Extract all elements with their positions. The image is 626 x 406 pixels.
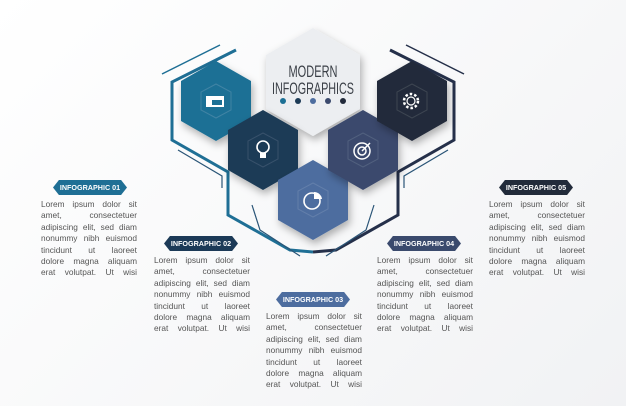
text 05: dolor bbox=[550, 199, 569, 209]
text 05: wisi bbox=[571, 267, 585, 277]
hex 2 bbox=[228, 110, 298, 190]
text 02: ipsum bbox=[185, 255, 208, 265]
hex 5 bbox=[377, 61, 447, 141]
label 04 bbox=[387, 236, 461, 251]
text 05: aliquam bbox=[556, 256, 585, 266]
text 04: laoreet bbox=[448, 301, 473, 311]
text 03: euismod bbox=[331, 345, 362, 355]
text 05: diam bbox=[567, 222, 585, 232]
text 03: nonummy bbox=[266, 345, 302, 355]
label 01: INFOGRAPHIC 01 bbox=[60, 183, 120, 192]
text 02: amet, bbox=[154, 266, 175, 276]
label 04: INFOGRAPHIC 04 bbox=[394, 239, 454, 248]
text 05: adipiscing bbox=[489, 222, 526, 232]
text 05: euismod bbox=[554, 233, 585, 243]
text 01: laoreet bbox=[112, 245, 137, 255]
label 05 bbox=[499, 180, 573, 195]
text 01: erat bbox=[41, 267, 55, 277]
text 04: dolor bbox=[438, 255, 457, 265]
text 05: magna bbox=[521, 256, 547, 266]
text 03: sit bbox=[354, 311, 362, 321]
text 05: tincidunt bbox=[489, 245, 520, 255]
text 05: Ut bbox=[553, 267, 562, 277]
text 02: elit, bbox=[196, 278, 209, 288]
text 01: elit, bbox=[83, 222, 96, 232]
text 05: consectetuer bbox=[537, 210, 585, 220]
text 05: volutpat. bbox=[513, 267, 544, 277]
text 04: sed bbox=[437, 278, 450, 288]
text 01 bbox=[41, 199, 137, 277]
hex 4 bbox=[328, 110, 398, 190]
text 01: dolor bbox=[102, 199, 121, 209]
text 02: wisi bbox=[236, 323, 250, 333]
text 02: consectetuer bbox=[202, 266, 250, 276]
text 02: ut bbox=[201, 301, 208, 311]
text 03: adipiscing bbox=[266, 334, 303, 344]
outline frame lines bbox=[162, 45, 464, 256]
text 05: amet, bbox=[489, 210, 510, 220]
text 02: magna bbox=[186, 312, 212, 322]
text 05: nonummy bbox=[489, 233, 525, 243]
text 04: elit, bbox=[419, 278, 432, 288]
text 04: nonummy bbox=[377, 289, 413, 299]
text 02: nibh bbox=[197, 289, 212, 299]
text 03: erat bbox=[266, 379, 280, 389]
text 03: laoreet bbox=[337, 357, 362, 367]
text 02: erat bbox=[154, 323, 168, 333]
text 01: magna bbox=[73, 256, 99, 266]
text 03: tincidunt bbox=[266, 357, 297, 367]
text 03: dolor bbox=[327, 311, 346, 321]
text 01: aliquam bbox=[108, 256, 137, 266]
text 01: Lorem bbox=[41, 199, 65, 209]
text 01: adipiscing bbox=[41, 222, 78, 232]
text 04: wisi bbox=[459, 323, 473, 333]
text 04: magna bbox=[409, 312, 435, 322]
dots bbox=[280, 98, 346, 104]
label 03: INFOGRAPHIC 03 bbox=[283, 295, 343, 304]
text 01: nibh bbox=[84, 233, 99, 243]
label 02: INFOGRAPHIC 02 bbox=[171, 239, 231, 248]
text 05: erat bbox=[489, 267, 503, 277]
text 03: consectetuer bbox=[314, 322, 362, 332]
text 03: amet, bbox=[266, 322, 287, 332]
title: MODERN bbox=[288, 62, 338, 81]
text 01: sit bbox=[129, 199, 137, 209]
text 04: diam bbox=[455, 278, 473, 288]
text 01: amet, bbox=[41, 210, 62, 220]
text 05: laoreet bbox=[560, 245, 585, 255]
text 04 bbox=[377, 255, 473, 333]
text 03: Ut bbox=[330, 379, 339, 389]
text 04: nibh bbox=[420, 289, 435, 299]
label 05: INFOGRAPHIC 05 bbox=[506, 183, 566, 192]
text 03: magna bbox=[298, 368, 324, 378]
text 01: tincidunt bbox=[41, 245, 72, 255]
text 05: Lorem bbox=[489, 199, 513, 209]
hex 3 bbox=[278, 160, 348, 240]
text 01: ut bbox=[88, 245, 95, 255]
text 02 bbox=[154, 255, 250, 333]
text 04: aliquam bbox=[444, 312, 473, 322]
text 03: aliquam bbox=[333, 368, 362, 378]
text 01: dolore bbox=[41, 256, 64, 266]
text 05: dolore bbox=[489, 256, 512, 266]
text 02: aliquam bbox=[221, 312, 250, 322]
text 02: Lorem bbox=[154, 255, 178, 265]
text 04: consectetuer bbox=[425, 266, 473, 276]
hex: center title: INFOGRAPHICS bbox=[272, 79, 354, 98]
text 03: wisi bbox=[348, 379, 362, 389]
text 01: sed bbox=[101, 222, 114, 232]
text 02: sit bbox=[242, 255, 250, 265]
text 02: sed bbox=[214, 278, 227, 288]
text 04: volutpat. bbox=[401, 323, 432, 333]
text 05: sit bbox=[577, 199, 585, 209]
text 03: diam bbox=[344, 334, 362, 344]
text 01: volutpat. bbox=[65, 267, 96, 277]
text 04: ut bbox=[424, 301, 431, 311]
text 05: sed bbox=[549, 222, 562, 232]
text 02: laoreet bbox=[225, 301, 250, 311]
text 03: ipsum bbox=[297, 311, 320, 321]
text 03: dolore bbox=[266, 368, 289, 378]
text 04: amet, bbox=[377, 266, 398, 276]
text 04: adipiscing bbox=[377, 278, 414, 288]
text 03: sed bbox=[326, 334, 339, 344]
text 02: tincidunt bbox=[154, 301, 185, 311]
text 04: erat bbox=[377, 323, 391, 333]
text 01: wisi bbox=[123, 267, 137, 277]
text 04: Lorem bbox=[377, 255, 401, 265]
text 02: dolor bbox=[215, 255, 234, 265]
text 05: nibh bbox=[532, 233, 547, 243]
text 04: dolore bbox=[377, 312, 400, 322]
text 01: diam bbox=[119, 222, 137, 232]
hex 1 bbox=[181, 61, 251, 141]
text 02: euismod bbox=[219, 289, 250, 299]
text 02: adipiscing bbox=[154, 278, 191, 288]
text 02: diam bbox=[232, 278, 250, 288]
text 05: elit, bbox=[531, 222, 544, 232]
text 02: dolore bbox=[154, 312, 177, 322]
text 02: Ut bbox=[218, 323, 227, 333]
text 04: euismod bbox=[442, 289, 473, 299]
text 04: ipsum bbox=[408, 255, 431, 265]
text 02: nonummy bbox=[154, 289, 190, 299]
text 03: elit, bbox=[308, 334, 321, 344]
text 04: sit bbox=[465, 255, 473, 265]
text 03: ut bbox=[313, 357, 320, 367]
text 03 bbox=[266, 311, 362, 389]
label 03 bbox=[276, 292, 350, 307]
text 01: euismod bbox=[106, 233, 137, 243]
text 03: Lorem bbox=[266, 311, 290, 321]
text 02: volutpat. bbox=[178, 323, 209, 333]
text 01: nonummy bbox=[41, 233, 77, 243]
label 01 bbox=[53, 180, 127, 195]
text 04: tincidunt bbox=[377, 301, 408, 311]
text 03: nibh bbox=[309, 345, 324, 355]
text 01: Ut bbox=[105, 267, 114, 277]
text 05 bbox=[489, 199, 585, 277]
text 01: ipsum bbox=[72, 199, 95, 209]
label 02 bbox=[164, 236, 238, 251]
text 05: ut bbox=[536, 245, 543, 255]
text 05: ipsum bbox=[520, 199, 543, 209]
text 01: consectetuer bbox=[89, 210, 137, 220]
text 04: Ut bbox=[441, 323, 450, 333]
hex: center title bbox=[266, 28, 360, 136]
text 03: volutpat. bbox=[290, 379, 321, 389]
